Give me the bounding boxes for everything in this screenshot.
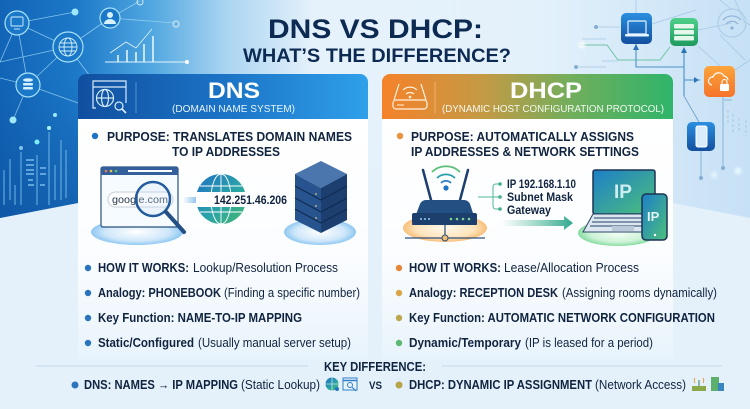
purpose: DHCP: PURPOSE: AUTOMATICALLY ASSIGNS	[411, 130, 634, 144]
icon: mini servers	[711, 377, 724, 391]
title: DNS VS DHCP:	[268, 14, 483, 44]
purpose: DNS: TO IP ADDRESSES	[172, 145, 280, 159]
feature list: DNS: Key Function: NAME-TO-IP MAPPING	[98, 311, 302, 325]
arrow: router to devices	[502, 216, 573, 230]
line chart: top left	[105, 29, 189, 64]
key difference: DHCP summary	[396, 377, 724, 392]
feature list: DNS	[85, 261, 360, 350]
network settings callout	[478, 179, 576, 217]
feature list: DHCP: Dynamic/Temporary	[409, 336, 521, 350]
purpose: DNS: PURPOSE: TRANSLATES DOMAIN NAMES	[107, 130, 352, 144]
feature list: DNS: (Usually manual server setup)	[198, 336, 351, 350]
purpose: DNS	[92, 130, 352, 159]
panel: DHCP	[382, 74, 717, 359]
vs label: VS	[369, 380, 382, 392]
illustration: server	[284, 161, 356, 245]
feature list: DHCP: HOW IT WORKS:	[409, 261, 501, 275]
network settings callout: Subnet Mask	[507, 192, 574, 204]
data bars: bottom left	[4, 126, 66, 205]
feature list: DHCP: Analogy: RECEPTION DESK	[409, 286, 558, 300]
IP address label: 142.251.46.206	[214, 195, 287, 207]
feature list: DHCP: Lease/Allocation Process	[504, 261, 639, 275]
feature list: DHCP	[396, 261, 717, 350]
purpose: DHCP: IP ADDRESSES & NETWORK SETTINGS	[411, 145, 639, 159]
panel header: DNS	[78, 74, 368, 119]
network illustration: top right	[574, 0, 750, 180]
illustration: laptop and phone: IP	[647, 209, 660, 224]
key difference: DNS summary: DNS: NAMES → IP MAPPING	[84, 378, 238, 392]
purpose: DHCP	[397, 130, 639, 159]
panel: DNS	[78, 74, 368, 359]
illustration: laptop and phone	[578, 170, 667, 246]
feature list: DHCP: Key Function: AUTOMATIC NETWORK CONFIGURATION	[409, 311, 715, 325]
network settings callout: IP 192.168.1.10	[507, 179, 576, 191]
icon: laptop tile	[621, 13, 652, 44]
feature list: DNS: HOW IT WORKS:	[98, 261, 189, 275]
icon: server tile	[670, 18, 698, 46]
panel header: DHCP: (DYNAMIC HOST CONFIGURATION PROTOCOL)	[442, 103, 664, 115]
icon: globe	[196, 174, 248, 224]
title: WHAT’S THE DIFFERENCE?	[243, 46, 511, 67]
feature list: DNS: Lookup/Resolution Process	[193, 261, 338, 275]
icon: phone tile	[687, 122, 715, 151]
key difference: DHCP summary: (Network Access)	[595, 378, 686, 392]
feature list: DNS: Analogy: PHONEBOOK	[98, 286, 221, 300]
illustration: browser lookup	[91, 167, 184, 245]
network settings callout: Gateway	[507, 205, 552, 217]
key difference: DHCP summary: DHCP: DYNAMIC IP ASSIGNMENT	[409, 378, 592, 392]
key difference: DNS summary: (Static Lookup)	[241, 378, 320, 392]
icon: mini router	[692, 378, 706, 391]
feature list: DNS: Static/Configured	[98, 336, 194, 350]
illustration: router	[403, 166, 487, 242]
illustration: laptop and phone: IP	[614, 182, 632, 203]
feature list: DHCP: (IP is leased for a period)	[525, 336, 653, 350]
icon: browser search	[343, 378, 357, 391]
key difference: DNS summary	[72, 378, 357, 392]
panel header: DHCP: DHCP	[510, 78, 582, 103]
panel header: DHCP	[382, 74, 673, 119]
panel header: DNS: DNS	[208, 78, 260, 103]
title	[243, 14, 511, 67]
panel header: DNS: (DOMAIN NAME SYSTEM)	[172, 103, 295, 115]
icon: globe search	[326, 378, 339, 391]
icon: cloud lock tile	[704, 66, 735, 97]
network illustration: top left	[0, 0, 179, 130]
feature list: DHCP: (Assigning rooms dynamically)	[562, 286, 717, 300]
feature list: DNS: (Finding a specific number)	[224, 286, 360, 300]
key difference heading: KEY DIFFERENCE:	[324, 360, 426, 374]
arrow: domain to IP	[183, 193, 210, 207]
illustration: browser lookup: google.com	[112, 194, 168, 206]
